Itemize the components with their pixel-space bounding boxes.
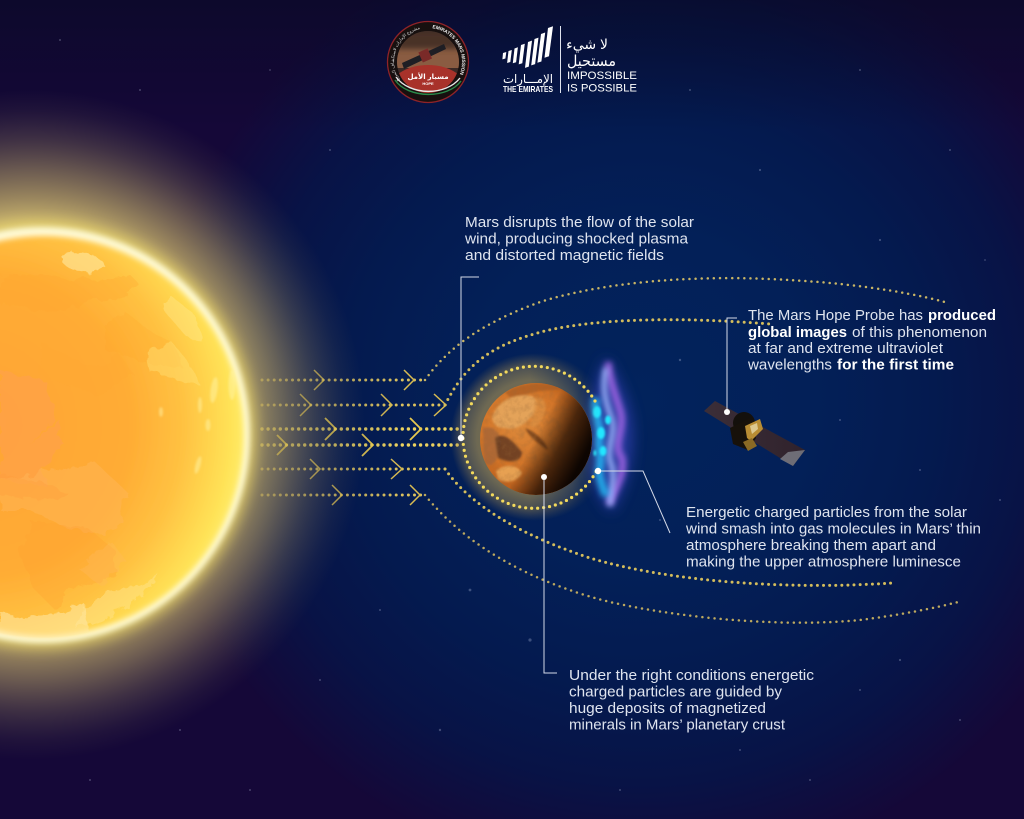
callout: Mars disrupts the solar wind: Mars disrupts the flow of the solar bbox=[465, 215, 694, 231]
callout: Under the right conditions: minerals in Mars’ planetary crust bbox=[569, 718, 785, 734]
callout: Hope Probe global images: The Mars Hope Probe has bbox=[748, 308, 923, 324]
mars with bow shock bbox=[452, 355, 597, 519]
callout: Hope Probe global images bbox=[724, 308, 996, 415]
callout: Under the right conditions: huge deposits of magnetized bbox=[569, 701, 766, 717]
callout: Energetic charged particles: atmosphere breaking them apart and bbox=[686, 538, 936, 554]
logo: Hope mission patch: مشروع الإمارات لاستكشاف المريخ bbox=[390, 28, 420, 82]
logo: Hope mission patch: EMIRATES MARS MISSION bbox=[432, 25, 466, 75]
callout: Mars disrupts the solar wind bbox=[458, 215, 694, 441]
callout: Energetic charged particles: Energetic charged particles from the solar bbox=[686, 505, 967, 521]
emirates stripes bbox=[502, 26, 553, 68]
callout: Hope Probe global images: at far and extreme ultraviolet bbox=[748, 341, 943, 357]
logo: The Emirates: IMPOSSIBLE bbox=[567, 70, 637, 82]
callout: Under the right conditions: Under the right conditions energetic bbox=[569, 668, 814, 684]
callout: Energetic charged particles: making the upper atmosphere luminesce bbox=[686, 554, 961, 570]
solar wind rows bbox=[262, 380, 463, 495]
callout: Energetic charged particles: wind smash into gas molecules in Mars’ thin bbox=[685, 522, 981, 538]
callout: Under the right conditions bbox=[541, 474, 814, 734]
logo: Hope mission patch: مسبار الأمل bbox=[407, 72, 449, 81]
logo: The Emirates: THE EMIRATES bbox=[503, 84, 553, 94]
callout: Hope Probe global images: wavelengths bbox=[747, 358, 832, 374]
satellite: Hope probe bbox=[704, 401, 805, 466]
bow shock dots bbox=[463, 366, 597, 508]
callout: Energetic charged particles bbox=[595, 468, 981, 570]
logo: The Emirates bbox=[502, 26, 637, 94]
magnetic field lines bbox=[425, 278, 958, 623]
callout: Mars disrupts the solar wind: and distorted magnetic fields bbox=[465, 248, 664, 264]
callout: Hope Probe global images: for the first time bbox=[837, 358, 954, 374]
logo: The Emirates: الإمـــارات bbox=[503, 72, 553, 87]
logo: Hope mission patch: HOPE bbox=[422, 81, 434, 86]
logo: The Emirates: IS POSSIBLE bbox=[567, 82, 637, 94]
solar panels bbox=[704, 401, 805, 466]
callout: Hope Probe global images: of this phenomenon bbox=[852, 325, 987, 341]
callout: Under the right conditions: charged particles are guided by bbox=[569, 684, 783, 700]
callout: Mars disrupts the solar wind: wind, producing shocked plasma bbox=[464, 232, 689, 248]
logo: The Emirates: لا شيء bbox=[566, 36, 608, 53]
callout: Hope Probe global images: global images bbox=[748, 325, 847, 341]
probe body bbox=[730, 412, 763, 451]
chevrons bbox=[277, 370, 446, 505]
aurora bbox=[589, 358, 632, 512]
bow shock glow bbox=[452, 355, 596, 519]
callout: Hope Probe global images: produced bbox=[928, 308, 996, 324]
planet bbox=[478, 381, 594, 497]
logo: The Emirates: مستحيل bbox=[567, 53, 616, 70]
sun bbox=[0, 90, 365, 760]
solar wind stream lines with chevrons bbox=[262, 370, 463, 505]
logo: Hope mission patch bbox=[386, 20, 470, 104]
